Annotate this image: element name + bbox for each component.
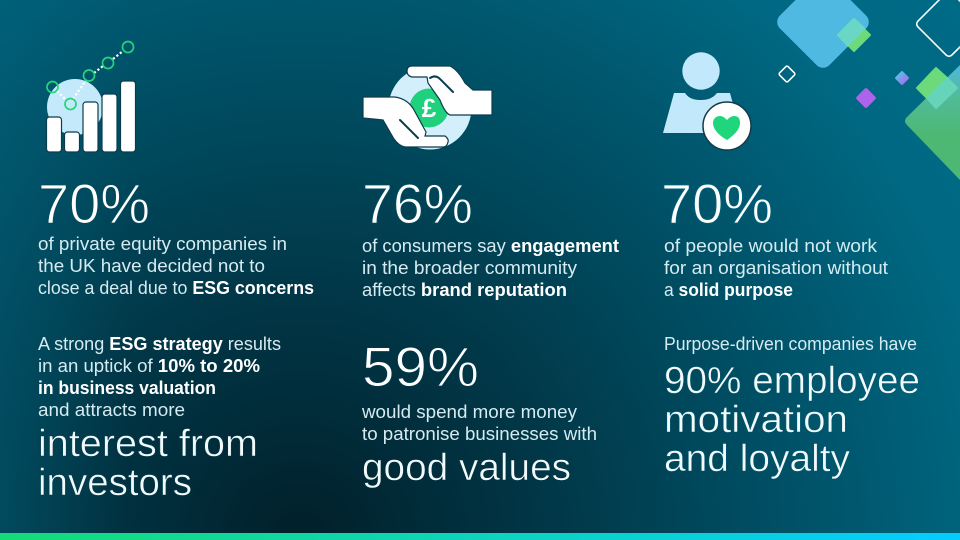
column 3: purpose text: for an organisation without: [664, 258, 888, 278]
column 2: statistic 76%: 76%: [362, 172, 473, 235]
column 1: interest from investors: [38, 423, 258, 504]
column 1: ESG strategy text: in business valuation: [38, 378, 216, 398]
column 1: private equity text: close a deal due to ESG concerns: [38, 278, 314, 298]
column 3: purpose text: of people would not work: [664, 236, 878, 256]
column 1: ESG strategy text: in an uptick of 10% to 20%: [38, 356, 260, 376]
column 3: purpose text: a solid purpose: [664, 280, 793, 300]
column 3: employee motivation and loyalty: [664, 360, 920, 480]
column 2: spend more text: would spend more money: [361, 402, 577, 422]
decorative diamonds: [774, 0, 960, 180]
column 1: ESG strategy text: A strong ESG strategy results: [38, 334, 281, 354]
column 1: statistic 70%: 70%: [38, 172, 150, 235]
column 2: consumers text: of consumers say engagement: [362, 236, 619, 256]
column 1: ESG strategy text: [38, 334, 281, 420]
column 3: employee motivation and loyalty: motivation: [664, 399, 848, 441]
column 3: purpose-driven companies: Purpose-driven companies have: [664, 334, 917, 354]
column 2: consumers text: affects brand reputation: [362, 280, 567, 300]
column 3: purpose text: [664, 236, 888, 300]
icon: hands holding pound coin: £: [422, 93, 437, 123]
column 1: private equity text: [38, 234, 314, 298]
column 3: employee motivation and loyalty: 90% employee: [664, 360, 920, 402]
column 2: statistic 59%: 59%: [362, 335, 479, 398]
column 2: consumers text: in the broader community: [362, 258, 577, 278]
column 1: interest from investors: interest from: [38, 423, 258, 465]
column 1: private equity text: the UK have decided not to: [38, 256, 265, 276]
column 2: spend more text: [361, 402, 597, 444]
column 1: interest from investors: investors: [38, 462, 192, 504]
column 2: consumers text: [362, 236, 619, 300]
column 2: spend more text: to patronise businesses with: [362, 424, 597, 444]
column 3: statistic 70%: 70%: [661, 172, 773, 235]
icon: bar chart with trend line: [46, 42, 136, 152]
column 3: employee motivation and loyalty: and loyalty: [664, 438, 850, 480]
column 1: private equity text: of private equity companies in: [38, 234, 287, 254]
column 1: ESG strategy text: and attracts more: [38, 400, 185, 420]
column 2: good values: good values: [362, 447, 571, 489]
icon: hands holding pound coin: [363, 66, 492, 150]
bottom gradient bar: [0, 533, 960, 540]
icon: person with heart badge: [663, 52, 751, 150]
